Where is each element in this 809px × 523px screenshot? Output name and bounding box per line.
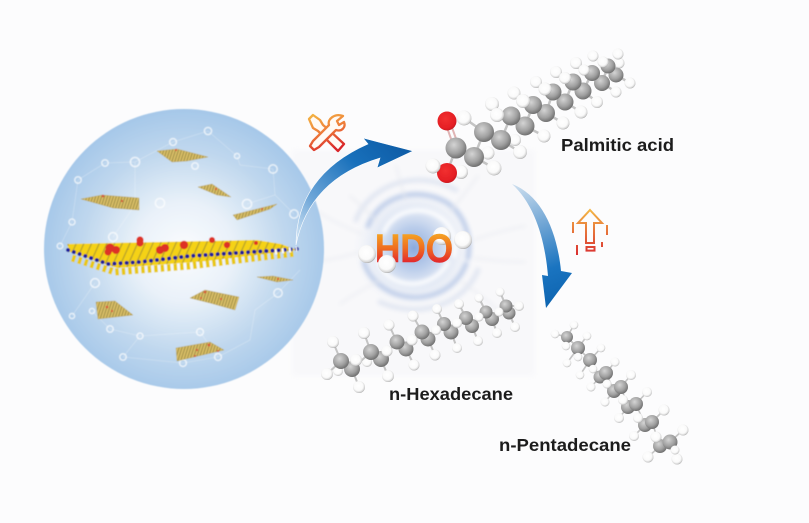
- front hydrogens: [426, 56, 636, 176]
- molecule: n-pentadecane: [551, 321, 688, 464]
- molecule: water hydrogens behind HDO: [433, 227, 451, 245]
- molecule: palmitic acid: [426, 48, 636, 183]
- arrow: catalyst to palmitic acid: [296, 138, 413, 245]
- bonds: [433, 62, 630, 173]
- main catalyst sheet: [67, 236, 297, 272]
- label: n-pentadecane: n-Pentadecane: [499, 435, 631, 455]
- carbons: [333, 300, 516, 377]
- front hydrogens: [321, 288, 524, 393]
- molecule: water hydrogens in front of HDO: [358, 231, 472, 273]
- small sheets: [81, 149, 293, 361]
- label: n-hexadecane: n-Hexadecane: [389, 384, 513, 404]
- hydrogens: [551, 321, 688, 464]
- oxygens: [437, 112, 457, 183]
- carbon double bond to oxygen: [445, 122, 459, 147]
- carbons: [561, 331, 678, 453]
- bonds: [555, 325, 683, 459]
- panel: catalyst sphere: [44, 109, 324, 389]
- back hydrogens: [454, 48, 624, 179]
- panel: HDO vortex backdrop: [292, 150, 535, 376]
- carbons: [446, 58, 624, 167]
- molecule: n-hexadecane: [321, 288, 524, 393]
- back hydrogens: [333, 357, 372, 376]
- label: palmitic acid: Palmitic acid: [561, 135, 674, 155]
- small sheet active sites: [102, 149, 279, 357]
- molecular background pattern: [57, 127, 300, 366]
- bonds: [327, 292, 519, 387]
- arrow: palmitic acid to n-pentadecane: [512, 184, 572, 308]
- icon: upward arrow: [573, 210, 607, 255]
- label: HDO: HDO: [375, 227, 453, 271]
- icon: tools: [309, 115, 345, 151]
